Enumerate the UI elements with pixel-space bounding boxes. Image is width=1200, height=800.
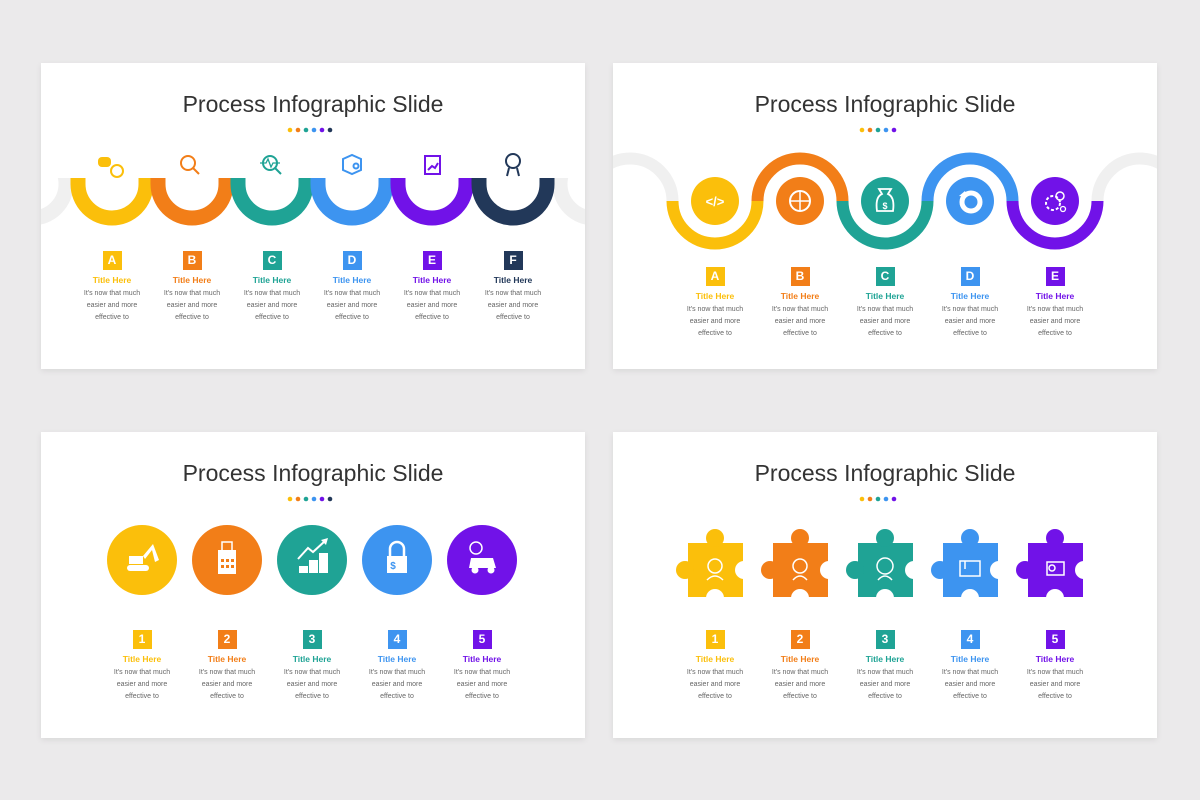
item 4: 4 [967, 632, 973, 646]
item F: easier and more [488, 302, 538, 309]
item 2: Title Here [781, 654, 819, 664]
item 2: It's now that much [772, 669, 828, 676]
item B: Title Here [173, 275, 211, 285]
item 1: easier and more [690, 681, 740, 688]
item 2: 2 [224, 632, 230, 646]
item 3 [284, 630, 340, 700]
item E: E [428, 253, 436, 267]
item 5 [1027, 630, 1083, 700]
item 3: easier and more [287, 681, 337, 688]
item E: E [1051, 269, 1059, 283]
item E: easier and more [1030, 318, 1080, 325]
dots [860, 128, 896, 132]
item 3: Title Here [293, 654, 331, 664]
item D [324, 251, 380, 321]
item E [1027, 267, 1083, 337]
item D: D [348, 253, 356, 267]
item 2: Title Here [208, 654, 246, 664]
item 2: easier and more [202, 681, 252, 688]
item D: effective to [335, 314, 369, 321]
item A [687, 267, 743, 337]
item E: easier and more [407, 302, 457, 309]
item 4: effective to [953, 693, 987, 700]
panel: slide 2 wave [613, 63, 1157, 369]
item 5 [454, 630, 510, 700]
title: Process Infographic Slide [755, 460, 1015, 486]
dots [288, 128, 332, 132]
item 1 [687, 630, 743, 700]
item 2: effective to [783, 693, 817, 700]
item B: B [188, 253, 196, 267]
dots [860, 497, 896, 501]
item 3: 3 [309, 632, 315, 646]
item C: effective to [868, 330, 902, 337]
item 1: easier and more [117, 681, 167, 688]
item A: A [711, 269, 719, 283]
item 5: easier and more [1030, 681, 1080, 688]
item 5: 5 [479, 632, 485, 646]
item 2 [772, 630, 828, 700]
item 3 [857, 630, 913, 700]
item A: effective to [698, 330, 732, 337]
chart: wave with circles [613, 128, 1157, 250]
icon circles: $ [390, 561, 396, 572]
panel: slide 4 puzzle [613, 432, 1157, 738]
item C: easier and more [860, 318, 910, 325]
item F: effective to [496, 314, 530, 321]
item 3: effective to [868, 693, 902, 700]
icon circles [107, 496, 517, 595]
item E: effective to [415, 314, 449, 321]
chart: semicircle chain [41, 128, 585, 226]
item A: effective to [95, 314, 129, 321]
item C: C [268, 253, 276, 267]
item 2 [199, 630, 255, 700]
item 2: 2 [797, 632, 803, 646]
item A: Title Here [696, 291, 734, 301]
item 1: effective to [125, 693, 159, 700]
item C [857, 267, 913, 337]
item 2: easier and more [775, 681, 825, 688]
item 4: It's now that much [369, 669, 425, 676]
item C: easier and more [247, 302, 297, 309]
item 5: Title Here [1036, 654, 1074, 664]
item E: effective to [1038, 330, 1072, 337]
item A [84, 251, 140, 321]
icon circles [691, 177, 1079, 225]
item A: It's now that much [84, 290, 140, 297]
dots [288, 497, 332, 501]
item 4 [942, 630, 998, 700]
item B: easier and more [775, 318, 825, 325]
panel: slide 3 circles [41, 432, 585, 738]
item D: Title Here [951, 291, 989, 301]
icon circles: </> [706, 194, 725, 209]
item 1: 1 [139, 632, 145, 646]
item D: D [966, 269, 974, 283]
item A: easier and more [87, 302, 137, 309]
item 1: 1 [712, 632, 718, 646]
title: Process Infographic Slide [183, 460, 443, 486]
item 4: Title Here [951, 654, 989, 664]
item A: Title Here [93, 275, 131, 285]
item E [404, 251, 460, 321]
item F: It's now that much [485, 290, 541, 297]
item F: Title Here [494, 275, 532, 285]
item D: Title Here [333, 275, 371, 285]
item 1: It's now that much [687, 669, 743, 676]
item 4 [369, 630, 425, 700]
item E: It's now that much [404, 290, 460, 297]
item E: Title Here [1036, 291, 1074, 301]
item D: easier and more [945, 318, 995, 325]
item 5: effective to [465, 693, 499, 700]
item 1: Title Here [123, 654, 161, 664]
item C: It's now that much [244, 290, 300, 297]
item 1: effective to [698, 693, 732, 700]
item 3: Title Here [866, 654, 904, 664]
icons [98, 154, 520, 177]
item E: It's now that much [1027, 306, 1083, 313]
item 5: It's now that much [1027, 669, 1083, 676]
item 1 [114, 630, 170, 700]
title: Process Infographic Slide [183, 91, 443, 117]
title: Process Infographic Slide [755, 91, 1015, 117]
item 5: It's now that much [454, 669, 510, 676]
icon circles: $ [882, 201, 888, 211]
item B: Title Here [781, 291, 819, 301]
item B: It's now that much [164, 290, 220, 297]
item E: Title Here [413, 275, 451, 285]
item C: Title Here [253, 275, 291, 285]
item B: B [796, 269, 804, 283]
item C: C [881, 269, 889, 283]
item 4: 4 [394, 632, 400, 646]
item F [485, 251, 541, 321]
item 3: easier and more [860, 681, 910, 688]
item B: It's now that much [772, 306, 828, 313]
item 4: easier and more [945, 681, 995, 688]
item 4: effective to [380, 693, 414, 700]
item F: F [509, 253, 517, 267]
item 5: 5 [1052, 632, 1058, 646]
item 2: It's now that much [199, 669, 255, 676]
item D: It's now that much [324, 290, 380, 297]
item D: effective to [953, 330, 987, 337]
item C [244, 251, 300, 321]
item 3: 3 [882, 632, 888, 646]
item B: easier and more [167, 302, 217, 309]
item D [942, 267, 998, 337]
item 5: easier and more [457, 681, 507, 688]
item 1: It's now that much [114, 669, 170, 676]
item A: It's now that much [687, 306, 743, 313]
panel: slide 1 semicircles [41, 63, 585, 369]
item C: It's now that much [857, 306, 913, 313]
item A: A [108, 253, 116, 267]
item 5: Title Here [463, 654, 501, 664]
item 4: easier and more [372, 681, 422, 688]
item 4: It's now that much [942, 669, 998, 676]
item 4: Title Here [378, 654, 416, 664]
item A: easier and more [690, 318, 740, 325]
item B: effective to [783, 330, 817, 337]
puzzle pieces [676, 496, 1083, 597]
item C: Title Here [866, 291, 904, 301]
item 1: Title Here [696, 654, 734, 664]
item B: effective to [175, 314, 209, 321]
item 5: effective to [1038, 693, 1072, 700]
item 3: It's now that much [857, 669, 913, 676]
item B [772, 267, 828, 337]
item B [164, 251, 220, 321]
item 3: It's now that much [284, 669, 340, 676]
item D: It's now that much [942, 306, 998, 313]
item C: effective to [255, 314, 289, 321]
item 3: effective to [295, 693, 329, 700]
item 2: effective to [210, 693, 244, 700]
item D: easier and more [327, 302, 377, 309]
